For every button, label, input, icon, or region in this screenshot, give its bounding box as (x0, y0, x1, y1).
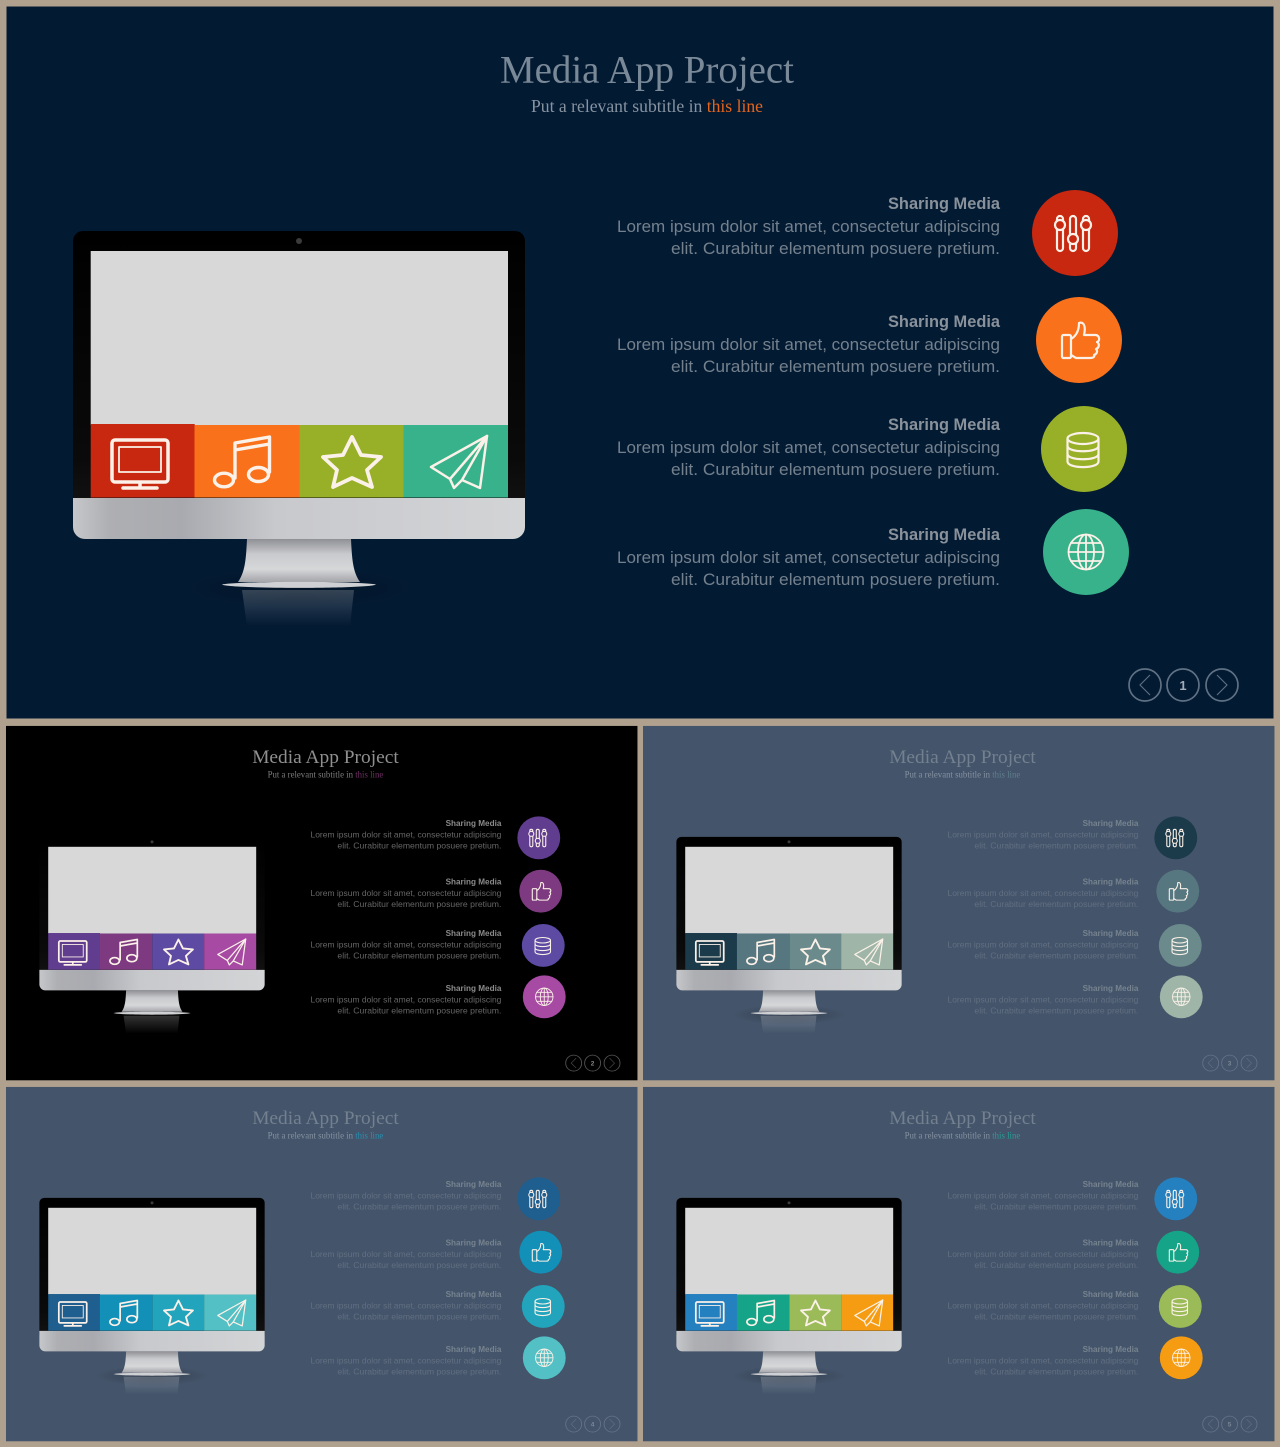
text block 4: Lorem ipsum dolor sit amet, consectetur adipiscing (311, 994, 502, 1004)
tile: monitor icon (48, 933, 100, 970)
icon circle: sliders (517, 1177, 560, 1220)
tile: star icon (300, 425, 404, 498)
text block 3: Lorem ipsum dolor sit amet, consectetur adipiscing (311, 1300, 502, 1310)
icon circle: sliders (1154, 1177, 1197, 1220)
text block 2: Lorem ipsum dolor sit amet, consectetur adipiscing (311, 1249, 502, 1259)
icon circle: database (1159, 1285, 1202, 1328)
monitor mockup (39, 837, 265, 1034)
text block 3: elit. Curabitur elementum posuere pretium. (671, 460, 1000, 479)
pagination: 2 (591, 1061, 595, 1068)
text block 3: Sharing Media (446, 1289, 502, 1299)
text block 2: Lorem ipsum dolor sit amet, consectetur adipiscing (617, 335, 1000, 354)
text block 1: Sharing Media (446, 1179, 502, 1189)
text block 4: Sharing Media (888, 525, 1001, 544)
text block 3: Lorem ipsum dolor sit amet, consectetur adipiscing (948, 1300, 1139, 1310)
text block 3 (948, 1289, 1139, 1321)
text block 2 (311, 877, 502, 909)
tile: star icon (152, 1295, 204, 1331)
text block 2: Sharing Media (888, 312, 1001, 331)
panel: slide 3 slate muted (643, 726, 1274, 1080)
text block 2: Sharing Media (1083, 1238, 1139, 1248)
subtitle: Put a relevant subtitle in this line (905, 770, 1020, 780)
text block 2: Lorem ipsum dolor sit amet, consectetur adipiscing (948, 888, 1139, 898)
text block 4: Lorem ipsum dolor sit amet, consectetur adipiscing (617, 548, 1000, 567)
tile: star icon (789, 1295, 841, 1331)
text block 2: Lorem ipsum dolor sit amet, consectetur adipiscing (311, 888, 502, 898)
tile: paper plane icon (404, 425, 508, 498)
monitor mockup (39, 1198, 265, 1395)
text block 1: elit. Curabitur elementum posuere pretium. (974, 1201, 1138, 1211)
text block 2: Lorem ipsum dolor sit amet, consectetur adipiscing (948, 1249, 1139, 1259)
text block 2 (617, 312, 1001, 376)
icon circle: globe (1160, 1336, 1203, 1379)
text block 2 (948, 1238, 1139, 1270)
text block 1 (311, 1179, 502, 1211)
subtitle: Put a relevant subtitle in this line (268, 1131, 383, 1141)
icon circle: database (1159, 924, 1202, 967)
text block 4: Sharing Media (446, 983, 502, 993)
text block 2 (948, 877, 1139, 909)
title: Media App Project (252, 747, 399, 768)
text block 1: elit. Curabitur elementum posuere pretium. (671, 239, 1000, 258)
tile: paper plane icon (204, 934, 256, 970)
pagination: 3 (1228, 1061, 1232, 1068)
text block 1: Lorem ipsum dolor sit amet, consectetur adipiscing (948, 1190, 1139, 1200)
tile: monitor icon (685, 1294, 737, 1331)
icon circle: thumbs up (1156, 1231, 1199, 1274)
text block 3 (311, 1289, 502, 1321)
text block 1: elit. Curabitur elementum posuere pretium. (337, 1201, 501, 1211)
text block 3: elit. Curabitur elementum posuere pretium. (974, 1311, 1138, 1321)
icon circle: globe (1160, 975, 1203, 1018)
pagination (1203, 1055, 1257, 1071)
pagination: 4 (591, 1422, 595, 1429)
panel: slide 2 black (6, 726, 637, 1080)
tile: paper plane icon (204, 1295, 256, 1331)
text block 1: Lorem ipsum dolor sit amet, consectetur adipiscing (311, 1190, 502, 1200)
title: Media App Project (252, 1108, 399, 1129)
text block 2: elit. Curabitur elementum posuere pretium. (974, 899, 1138, 909)
text block 3 (311, 928, 502, 960)
slide background (643, 726, 1274, 1080)
text block 1: Sharing Media (1083, 818, 1139, 828)
text block 1: Sharing Media (1083, 1179, 1139, 1189)
tile: monitor icon (48, 1294, 100, 1331)
text block 1: elit. Curabitur elementum posuere pretium. (337, 840, 501, 850)
text block 3: elit. Curabitur elementum posuere pretium. (337, 950, 501, 960)
tile: monitor icon (91, 424, 195, 498)
text block 2: elit. Curabitur elementum posuere pretium. (671, 357, 1000, 376)
title: Media App Project (500, 48, 794, 92)
text block 3: Sharing Media (888, 415, 1001, 434)
text block 1 (617, 194, 1001, 258)
text block 4: Lorem ipsum dolor sit amet, consectetur adipiscing (311, 1355, 502, 1365)
panel: slide 4 slate blue (6, 1087, 637, 1441)
icon circle: database (522, 924, 565, 967)
pagination (1129, 669, 1238, 701)
text block 4: elit. Curabitur elementum posuere pretium. (974, 1366, 1138, 1376)
text block 1 (311, 818, 502, 850)
text block 3: elit. Curabitur elementum posuere pretium. (974, 950, 1138, 960)
text block 4: elit. Curabitur elementum posuere pretium. (974, 1005, 1138, 1015)
text block 2: Sharing Media (1083, 877, 1139, 887)
subtitle: Put a relevant subtitle in this line (905, 1131, 1020, 1141)
icon circle: database (1041, 406, 1127, 492)
icon circle: globe (1043, 509, 1129, 595)
text block 4: elit. Curabitur elementum posuere pretium. (671, 570, 1000, 589)
text block 3 (948, 928, 1139, 960)
tile: music icon (100, 934, 152, 970)
tile: music icon (100, 1295, 152, 1331)
icon circle: database (522, 1285, 565, 1328)
text block 4: elit. Curabitur elementum posuere pretium. (337, 1005, 501, 1015)
tile: monitor icon (685, 933, 737, 970)
text block 3: Lorem ipsum dolor sit amet, consectetur adipiscing (311, 939, 502, 949)
slide background (6, 1087, 637, 1441)
text block 1 (948, 818, 1139, 850)
tile: music icon (194, 425, 300, 498)
pagination: 1 (1179, 678, 1187, 693)
text block 4 (311, 1344, 502, 1376)
pagination (566, 1055, 620, 1071)
title: Media App Project (889, 747, 1036, 768)
slide background (6, 6, 1274, 718)
text block 4: Lorem ipsum dolor sit amet, consectetur adipiscing (948, 994, 1139, 1004)
subtitle: Put a relevant subtitle in this line (531, 96, 763, 116)
icon circle: globe (523, 975, 566, 1018)
text block 1 (948, 1179, 1139, 1211)
monitor mockup (676, 837, 902, 1034)
monitor mockup (676, 1198, 902, 1395)
tile: paper plane icon (841, 1295, 893, 1331)
text block 3: Lorem ipsum dolor sit amet, consectetur adipiscing (617, 438, 1000, 457)
tile: star icon (789, 934, 841, 970)
slide background (6, 726, 637, 1080)
text block 4 (617, 525, 1001, 589)
tile: music icon (737, 934, 789, 970)
text block 3: Lorem ipsum dolor sit amet, consectetur adipiscing (948, 939, 1139, 949)
icon circle: sliders (1032, 190, 1118, 276)
subtitle: Put a relevant subtitle in this line (268, 770, 383, 780)
text block 4: Sharing Media (1083, 983, 1139, 993)
text block 1: Lorem ipsum dolor sit amet, consectetur adipiscing (617, 217, 1000, 236)
text block 2: Sharing Media (446, 1238, 502, 1248)
text block 3: Sharing Media (1083, 1289, 1139, 1299)
text block 2: Sharing Media (446, 877, 502, 887)
text block 3: Sharing Media (1083, 928, 1139, 938)
text block 2: elit. Curabitur elementum posuere pretium. (337, 1260, 501, 1270)
slide background (643, 1087, 1274, 1441)
text block 3: Sharing Media (446, 928, 502, 938)
icon circle: thumbs up (1156, 870, 1199, 913)
text block 2: elit. Curabitur elementum posuere pretium. (337, 899, 501, 909)
text block 4: Lorem ipsum dolor sit amet, consectetur adipiscing (948, 1355, 1139, 1365)
text block 4 (948, 983, 1139, 1015)
monitor mockup (73, 231, 525, 626)
text block 3 (617, 415, 1001, 479)
text block 4 (948, 1344, 1139, 1376)
title: Media App Project (889, 1108, 1036, 1129)
text block 2 (311, 1238, 502, 1270)
panel: slide 5 slate multicolour (643, 1087, 1274, 1441)
icon circle: globe (523, 1336, 566, 1379)
icon circle: sliders (517, 816, 560, 859)
pagination (566, 1416, 620, 1432)
icon circle: thumbs up (1036, 297, 1122, 383)
icon circle: thumbs up (519, 870, 562, 913)
text block 1: Sharing Media (446, 818, 502, 828)
tile: paper plane icon (841, 934, 893, 970)
panel: main slide navy (6, 6, 1274, 718)
text block 4: Sharing Media (446, 1344, 502, 1354)
icon circle: thumbs up (519, 1231, 562, 1274)
icon circle: sliders (1154, 816, 1197, 859)
pagination: 5 (1228, 1422, 1232, 1429)
text block 4 (311, 983, 502, 1015)
pagination (1203, 1416, 1257, 1432)
text block 4: elit. Curabitur elementum posuere pretium. (337, 1366, 501, 1376)
text block 1: Lorem ipsum dolor sit amet, consectetur adipiscing (311, 829, 502, 839)
text block 2: elit. Curabitur elementum posuere pretium. (974, 1260, 1138, 1270)
text block 1: Sharing Media (888, 194, 1001, 213)
tile: star icon (152, 934, 204, 970)
text block 4: Sharing Media (1083, 1344, 1139, 1354)
tile: music icon (737, 1295, 789, 1331)
text block 1: elit. Curabitur elementum posuere pretium. (974, 840, 1138, 850)
text block 3: elit. Curabitur elementum posuere pretium. (337, 1311, 501, 1321)
text block 1: Lorem ipsum dolor sit amet, consectetur adipiscing (948, 829, 1139, 839)
